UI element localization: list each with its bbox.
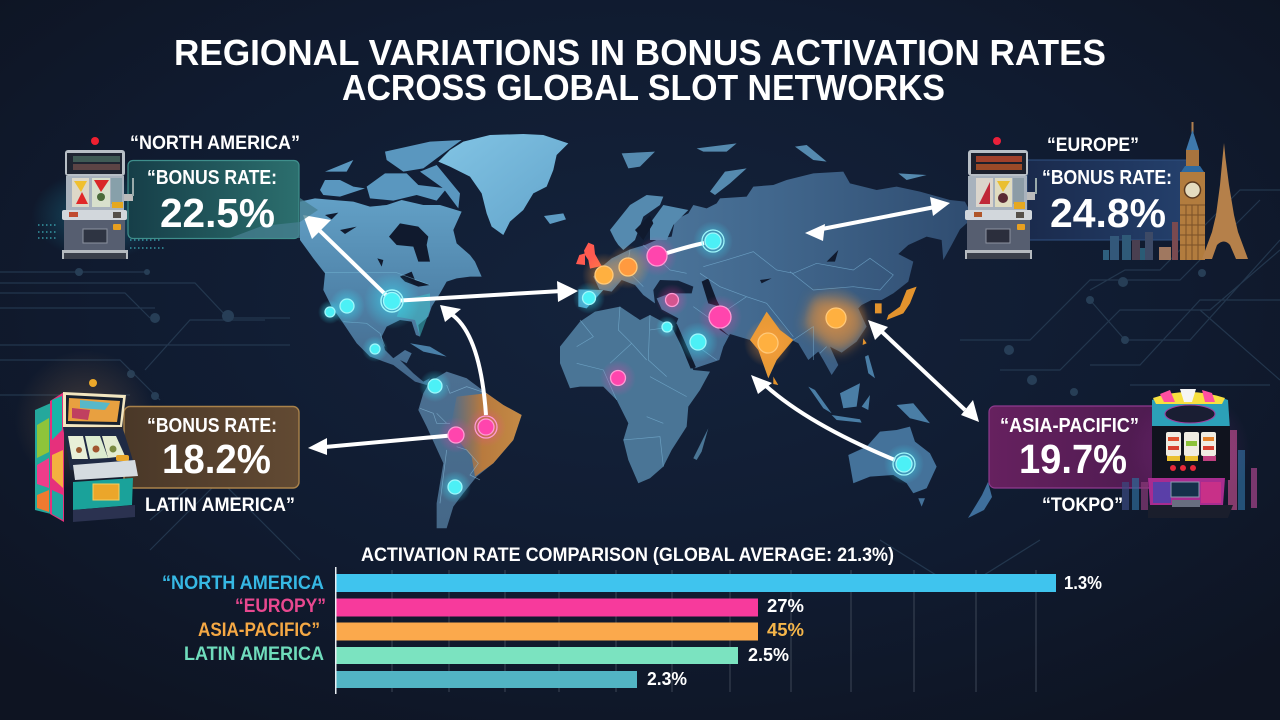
bar: asia-pacific: 45%	[767, 620, 804, 640]
bar: asia-pacific	[198, 619, 804, 641]
bar: latin america: 2.5%	[748, 645, 789, 665]
bar: north america: “NORTH AMERICA	[162, 572, 324, 594]
callout box	[989, 406, 1159, 488]
map glows	[318, 221, 924, 503]
circuit board decoration	[0, 190, 1280, 590]
bonus rate value: 19.7%	[1019, 436, 1127, 482]
bar: north america	[162, 572, 1102, 594]
icon: slot machine	[62, 137, 134, 259]
map markers	[325, 230, 915, 494]
panel: latin america	[15, 350, 299, 522]
bonus rate label: “BONUS RATE:	[1042, 167, 1172, 189]
glow behind machine	[32, 170, 167, 260]
title: ACROSS GLOBAL SLOT NETWORKS	[342, 67, 945, 108]
bar: latin america: LATIN AMERICA	[184, 643, 324, 665]
bar: unlabelled	[336, 669, 687, 689]
world map	[300, 134, 973, 528]
chart title: ACTIVATION RATE COMPARISON (GLOBAL AVERAGE: 21.3%)	[361, 545, 894, 566]
bar: europe	[235, 595, 804, 617]
callout box	[128, 160, 299, 238]
connector arrows	[303, 197, 979, 460]
bar: asia-pacific: ASIA-PACIFIC”	[198, 619, 320, 641]
region label: “EUROPE”	[1047, 135, 1139, 156]
bar: europe: 27%	[767, 596, 804, 616]
bar: europe: “EUROPY”	[235, 595, 326, 617]
bonus rate value: 18.2%	[162, 436, 271, 482]
bonus rate value: 24.8%	[1050, 190, 1166, 236]
title: REGIONAL VARIATIONS IN BONUS ACTIVATION RATES	[174, 32, 1106, 73]
region label: “ASIA-PACIFIC”	[1000, 415, 1139, 437]
region label: LATIN AMERICA”	[145, 495, 295, 516]
icon: skyline	[1103, 222, 1178, 260]
icon: neon skyline	[1122, 430, 1257, 510]
bar: north america: 1.3%	[1064, 573, 1102, 593]
icon: eiffel tower	[1202, 143, 1248, 259]
map: north and south america	[300, 134, 568, 528]
bar chart: activation rate comparison	[162, 545, 1102, 694]
icon: new zealand	[968, 482, 992, 518]
panel: europe	[965, 122, 1248, 260]
bonus rate label: “BONUS RATE:	[147, 167, 277, 189]
city label: “TOKPO”	[1042, 495, 1123, 516]
callout box	[1027, 160, 1187, 240]
icon: big ben	[1180, 122, 1205, 260]
bar: latin america	[184, 643, 789, 665]
callout box	[124, 406, 299, 488]
bar: unlabelled: 2.3%	[647, 669, 687, 689]
panel: asia-pacific	[968, 389, 1257, 518]
bonus rate value: 22.5%	[160, 190, 275, 236]
icon: slot machine	[1148, 389, 1233, 518]
panel: north america	[32, 133, 318, 260]
arrow heads	[303, 197, 979, 455]
icon: slot machine	[35, 379, 138, 522]
region label: “NORTH AMERICA”	[130, 133, 300, 154]
map: china warm glow	[803, 297, 867, 353]
map: europe asia africa oceania	[560, 143, 973, 507]
icon: slot machine	[965, 137, 1037, 259]
title	[174, 32, 1106, 108]
bonus rate label: “BONUS RATE:	[147, 415, 277, 437]
